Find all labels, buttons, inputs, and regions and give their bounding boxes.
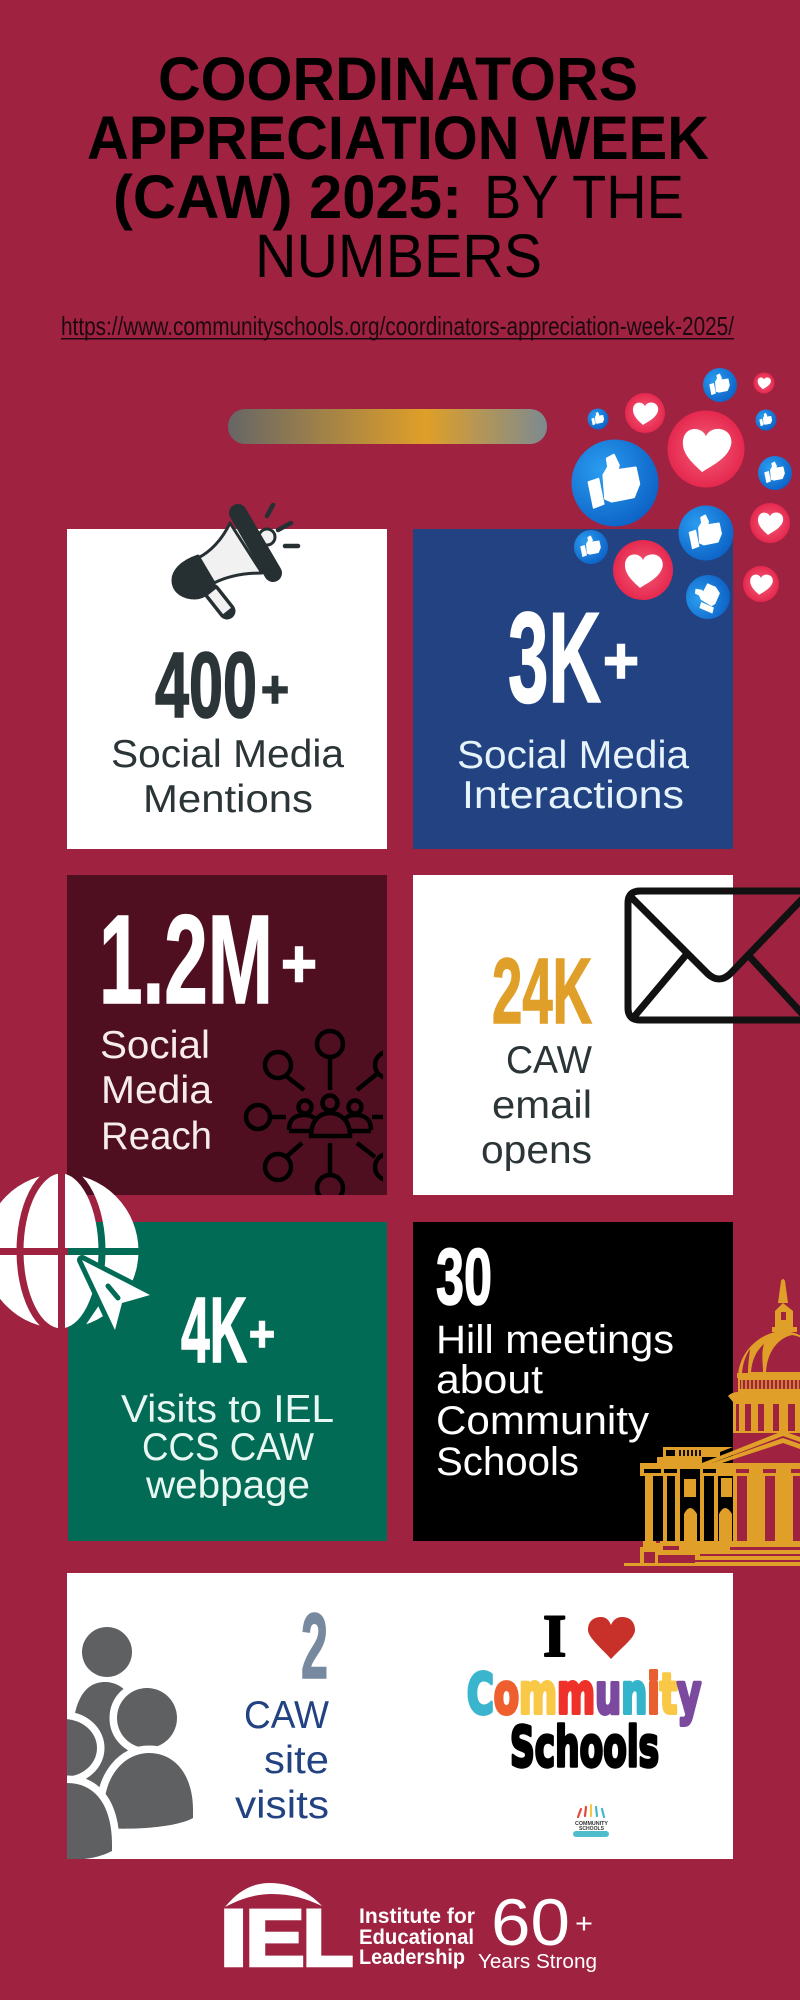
panel: CAW site visits and community schools: 2 [301,1594,328,1698]
badge: 60+ years strong: 60 [491,1885,570,1959]
title: BY THE [484,163,684,231]
panel: hill meetings: Hill meetings [436,1318,674,1362]
badge: 60+ years strong [478,1885,597,1973]
panel: visits to webpage [68,1222,387,1541]
panel: social media mentions: Social Media [111,733,344,776]
icon: social reactions cluster [572,368,792,628]
panel: social media reach: 1.2M [99,889,273,1030]
graphic: I love Community Schools: Community [467,1664,701,1727]
panel: CAW email opens: opens [481,1129,592,1172]
panel: social media reach: + [281,926,317,1002]
panel: CAW email opens: 24K [492,939,592,1043]
panel: hill meetings: Schools [436,1440,579,1484]
panel: visits to webpage: webpage [145,1464,310,1507]
gradient divider bar [228,409,547,444]
icon: small coalition for community schools logo: COMMUNITY [575,1821,609,1827]
panel: social media interactions: Social Media [457,734,689,777]
panel: hill meetings: about [436,1358,543,1402]
icon: capitol building [624,1279,800,1566]
icon: globe with cursor [0,1174,150,1330]
panel: social media interactions: Interactions [462,774,684,817]
panel: social media reach: Social [100,1024,210,1067]
logo: Institute for Educational Leadership: I [219,1893,249,1984]
panel: CAW site visits and community schools: CAW [244,1694,329,1737]
panel: CAW email opens [413,875,733,1195]
badge: 60+ years strong: Years Strong [478,1951,597,1973]
panel: visits to webpage: + [249,1306,275,1362]
panel: social media reach: Reach [101,1115,212,1158]
panel: visits to webpage: Visits to IEL [121,1388,334,1431]
icon: small coalition for community schools logo: SCHOOLS [579,1826,605,1832]
panel: CAW email opens: CAW [506,1039,592,1082]
panel: hill meetings: 30 [436,1232,492,1321]
panel: social media reach [67,875,387,1195]
panel: CAW email opens: email [492,1084,592,1127]
logo: Institute for Educational Leadership: E [245,1893,305,1984]
panel: social media interactions: 3K [508,586,601,730]
panel: CAW site visits and community schools: site [264,1739,329,1782]
logo: Institute for Educational Leadership: L [302,1893,354,1984]
logo: Institute for Educational Leadership: Institute for [359,1905,475,1928]
panel: hill meetings: Community [436,1399,649,1443]
panel: visits to webpage: CCS CAW [142,1426,314,1469]
panel: hill meetings [413,1222,733,1541]
panel: visits to webpage: 4K [181,1278,247,1382]
panel: social media mentions: + [261,661,289,719]
panel: social media interactions: + [603,623,639,697]
icon: megaphone [173,505,298,611]
icon: network of people [244,1028,383,1195]
badge: 60+ years strong: + [575,1908,593,1939]
logo: Institute for Educational Leadership: Leadership [359,1946,465,1969]
icon: group of people [67,1627,193,1859]
title: NUMBERS [255,222,542,290]
panel: social media mentions: Mentions [143,778,313,821]
logo: Institute for Educational Leadership [219,1883,475,1984]
title: (CAW) 2025: [113,163,462,231]
panel: social media mentions [67,529,387,849]
icon: small coalition for community schools logo [573,1805,609,1837]
panel: social media interactions [413,529,733,849]
panel: social media mentions: 400 [155,633,257,737]
title [87,45,709,290]
panel: CAW site visits and community schools [67,1573,733,1859]
icon: envelope [628,891,800,1020]
title: COORDINATORS [158,45,638,113]
graphic: I love Community Schools: I [543,1603,566,1669]
graphic: I love Community Schools: Schools [510,1714,659,1779]
graphic: I love Community Schools [467,1603,701,1779]
title: APPRECIATION WEEK [87,104,709,172]
panel: CAW site visits and community schools: visits [235,1784,329,1827]
logo: Institute for Educational Leadership: Educational [359,1926,474,1949]
panel: social media reach: Media [101,1069,212,1112]
